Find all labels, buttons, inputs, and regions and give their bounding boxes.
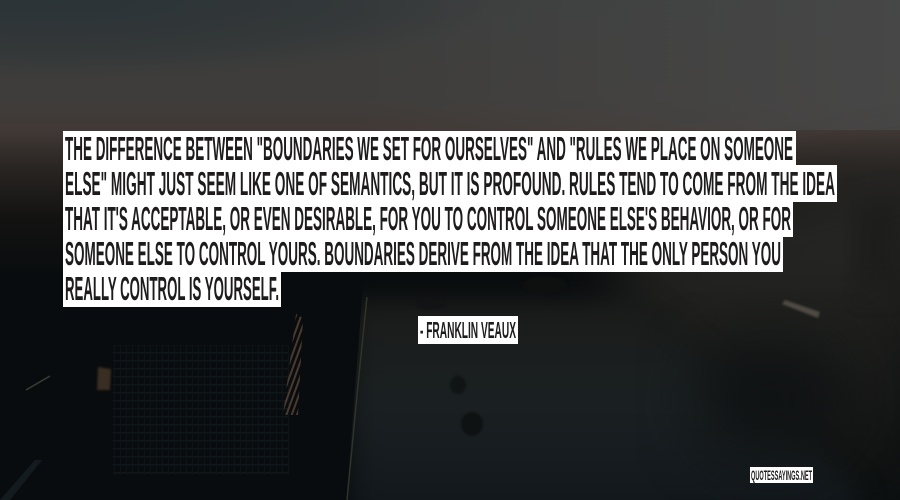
quote text block [63,130,837,307]
author attribution [418,316,518,344]
dark water patch [695,340,845,460]
quote line 5 [63,270,281,307]
building grid [113,345,289,475]
river [350,300,860,500]
text: - FRANKLIN VEAUX [420,317,516,343]
lit facade [283,314,303,415]
tower, far right [855,195,900,290]
text: QUOTESSAYINGS.NET [751,468,812,483]
watermark [750,467,813,483]
boats [416,300,444,310]
right bank [600,170,900,500]
city block left [0,272,364,500]
river bank line [347,297,367,500]
quote text block: REALLY CONTROL IS YOURSELF. [65,270,279,307]
